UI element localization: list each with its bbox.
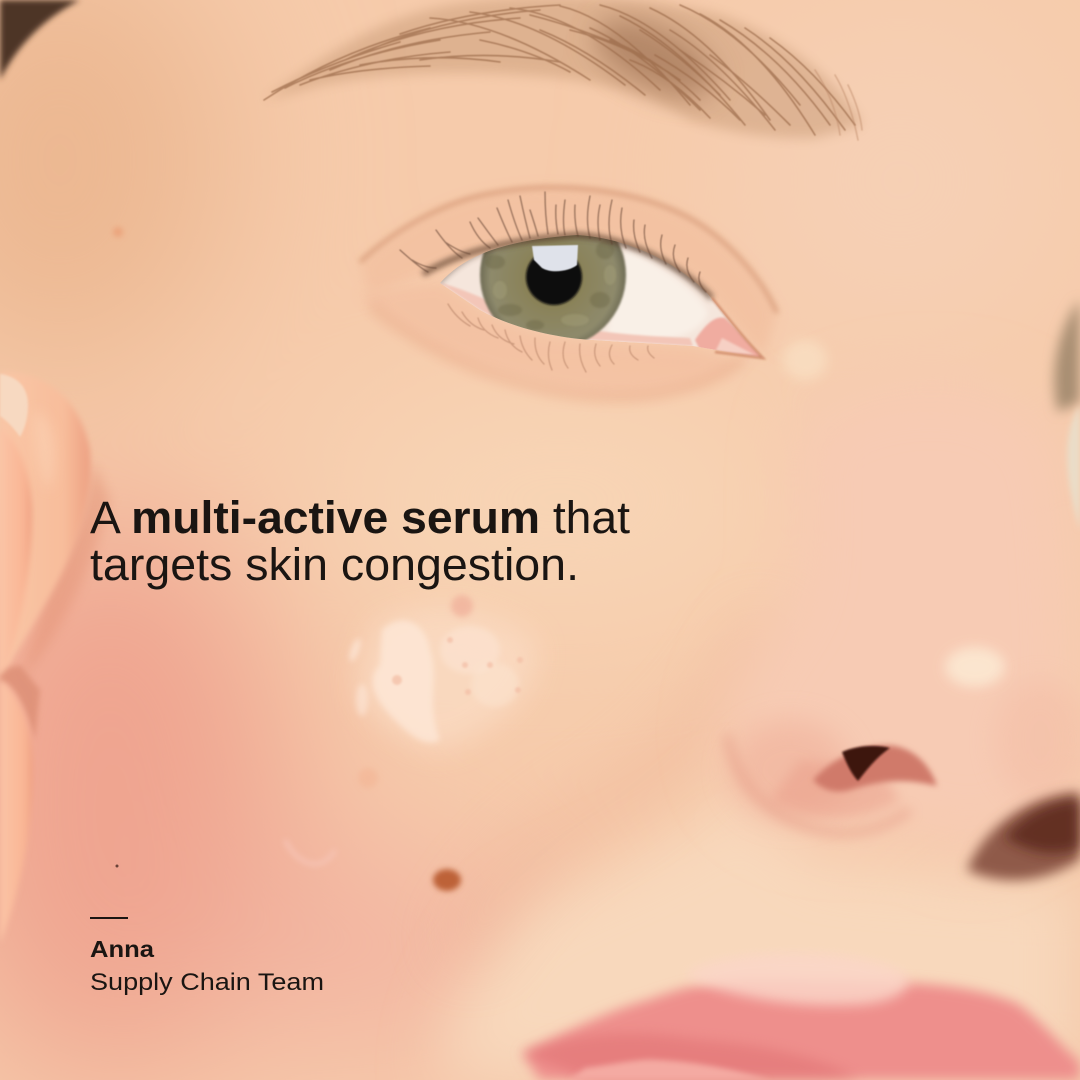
attribution [90, 917, 324, 996]
lower lashes [448, 304, 654, 372]
eyebrow [264, 0, 862, 140]
headline: A multi-active serum that [90, 492, 631, 543]
hair [0, 0, 80, 80]
headline [90, 492, 631, 590]
serum sheen on cheek [347, 609, 536, 750]
far side of face [1054, 300, 1080, 412]
upper eyelid [360, 187, 777, 358]
headline: targets skin congestion. [90, 539, 579, 590]
fingers [0, 372, 110, 943]
upper lashes [400, 192, 706, 292]
lips [522, 954, 1080, 1080]
finger: front [0, 680, 33, 943]
attribution: Supply Chain Team [90, 969, 324, 996]
upper lash line [423, 235, 712, 298]
finger: back [0, 372, 91, 680]
blemishes [433, 869, 461, 891]
cheek crease shadow [460, 620, 770, 960]
lower eyelid [360, 283, 740, 395]
eyelid crease [360, 187, 777, 313]
eye [400, 192, 770, 372]
nose [725, 381, 1080, 880]
highlight beside eye [783, 340, 827, 380]
attribution: Anna [90, 936, 154, 962]
fingernail [0, 374, 28, 437]
lower lip [570, 1060, 770, 1080]
cream skin below cheek crease [440, 780, 1080, 1080]
left nostril [813, 745, 937, 792]
right nostril [967, 792, 1080, 880]
finger: middle [0, 428, 32, 676]
